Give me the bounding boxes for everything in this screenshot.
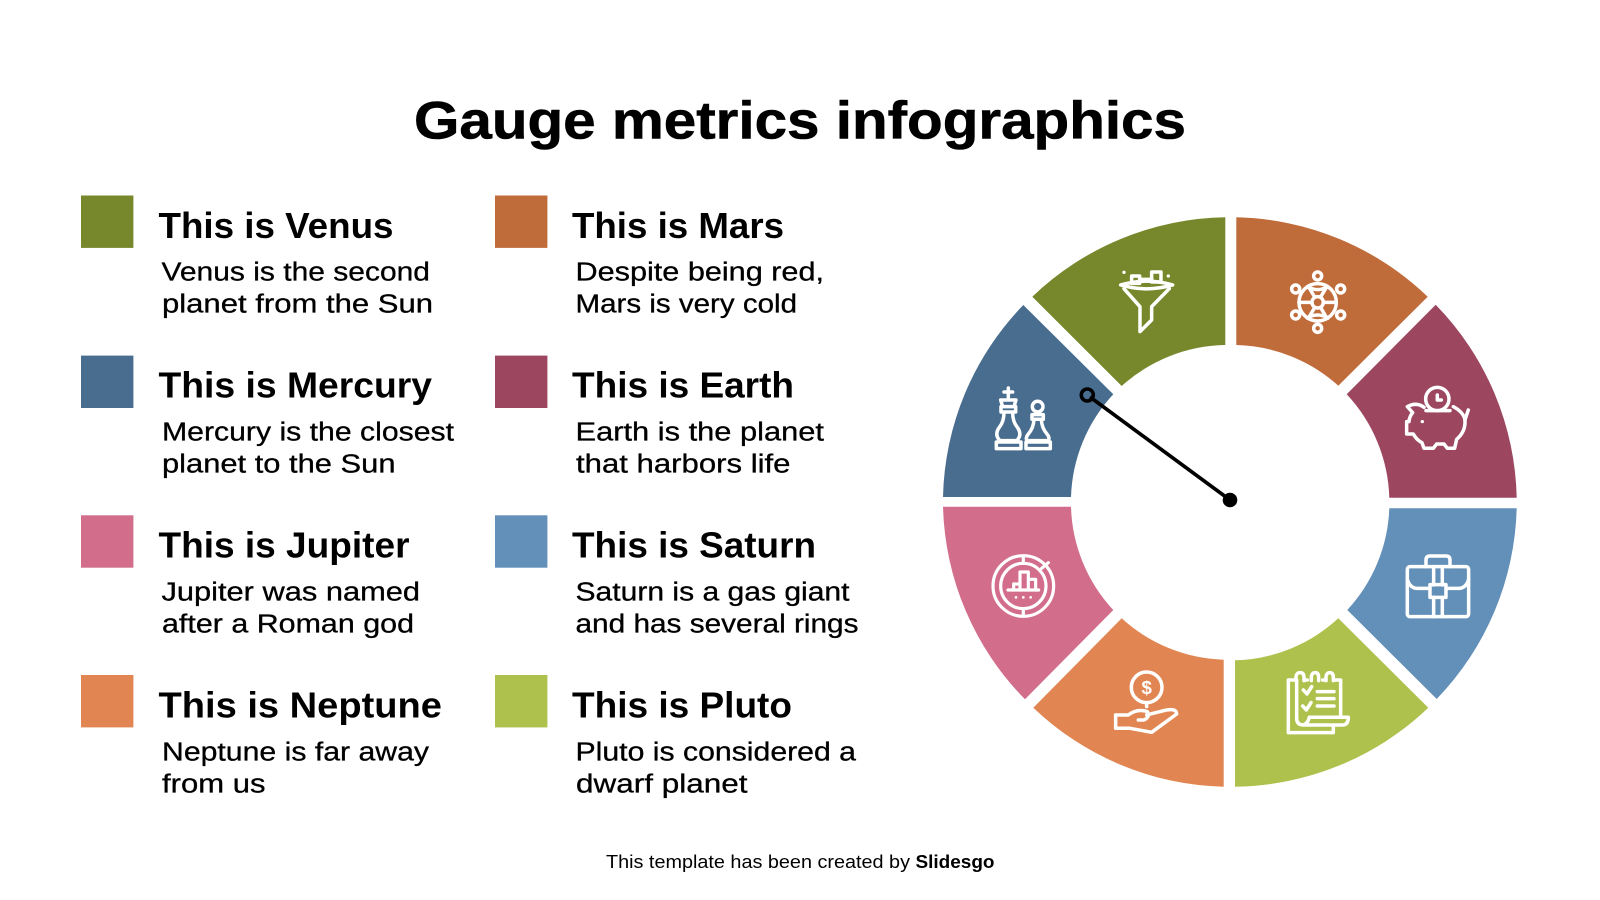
text: Pluto description: Pluto is considered a — [576, 739, 857, 767]
legend: Neptune — [81, 675, 442, 798]
text: Neptune description: Neptune is far away — [162, 739, 429, 767]
text: Venus description — [162, 259, 433, 318]
segment: Saturn — [1347, 508, 1517, 699]
swatch: Mercury — [81, 356, 133, 408]
heading: Jupiter: This is Jupiter — [158, 525, 410, 566]
text: Mars description: Despite being red, — [576, 259, 824, 287]
text: Jupiter description — [162, 579, 420, 638]
text: Saturn description: Saturn is a gas giant — [576, 579, 850, 607]
icon: money in hand: $ — [1141, 677, 1152, 698]
text: Pluto description: dwarf planet — [576, 770, 748, 798]
title: Gauge metrics infographics — [414, 92, 1186, 150]
swatch: Venus — [81, 196, 133, 248]
heading: Venus: This is Venus — [158, 205, 394, 246]
icon: chess pieces — [996, 388, 1050, 449]
legend: Earth — [495, 356, 824, 478]
icon: checklist — [1288, 673, 1348, 733]
swatch: Saturn — [495, 515, 547, 568]
swatch: Earth — [495, 356, 547, 408]
icon: network wheel — [1292, 272, 1345, 332]
segment: Pluto — [1235, 618, 1428, 787]
text: Mars description — [576, 259, 824, 318]
gauge needle — [1081, 389, 1237, 507]
heading: Earth: This is Earth — [572, 365, 794, 406]
segment: Jupiter — [943, 507, 1113, 699]
icon: briefcase — [1407, 556, 1469, 617]
legend: Mars — [495, 196, 824, 318]
footer credit: This template has been created by — [606, 852, 910, 872]
text: Venus description: planet from the Sun — [162, 290, 433, 318]
icon: chart in target — [993, 556, 1054, 616]
segment: Mars — [1236, 217, 1428, 386]
text: Jupiter description: Jupiter was named — [162, 579, 420, 607]
heading: Neptune: This is Neptune — [158, 684, 442, 725]
text: Pluto description — [576, 739, 857, 798]
legend: Venus — [81, 196, 433, 318]
swatch: Mars — [495, 196, 547, 248]
icon: piggy bank — [1407, 387, 1468, 448]
swatch: Neptune — [81, 675, 133, 727]
text: Neptune description: from us — [162, 770, 266, 798]
heading: Saturn: This is Saturn — [572, 525, 816, 566]
legend: Mercury — [81, 356, 454, 478]
text: Jupiter description: after a Roman god — [162, 610, 414, 638]
text: Venus description: Venus is the second — [162, 259, 430, 287]
text: Mercury description: Mercury is the closest — [162, 419, 454, 447]
text: Saturn description — [576, 579, 858, 638]
gauge ring — [943, 217, 1517, 787]
legend: Pluto — [495, 675, 857, 798]
text: Mars description: Mars is very cold — [576, 290, 797, 318]
swatch: Pluto — [495, 675, 547, 727]
segment: Earth — [1347, 305, 1517, 498]
segment: Mercury — [943, 305, 1113, 497]
text: Saturn description: and has several rings — [576, 610, 858, 638]
text: Mercury description — [162, 419, 454, 478]
text: Neptune description — [162, 739, 429, 798]
segment: Neptune — [1033, 618, 1224, 787]
text: Earth description — [576, 419, 824, 478]
text: Earth description: Earth is the planet — [576, 419, 824, 447]
legend: Saturn — [495, 515, 858, 638]
segment: Venus — [1032, 217, 1225, 386]
footer credit: Slidesgo — [916, 852, 995, 872]
icon: money in hand — [1116, 672, 1177, 732]
icon: funnel — [1121, 271, 1173, 332]
text: Earth description: that harbors life — [576, 450, 790, 478]
legend: Jupiter — [81, 515, 420, 638]
heading: Mars: This is Mars — [572, 205, 784, 246]
heading: Mercury: This is Mercury — [158, 365, 433, 406]
text: Mercury description: planet to the Sun — [162, 450, 396, 478]
heading: Pluto: This is Pluto — [572, 684, 792, 725]
swatch: Jupiter — [81, 515, 133, 568]
